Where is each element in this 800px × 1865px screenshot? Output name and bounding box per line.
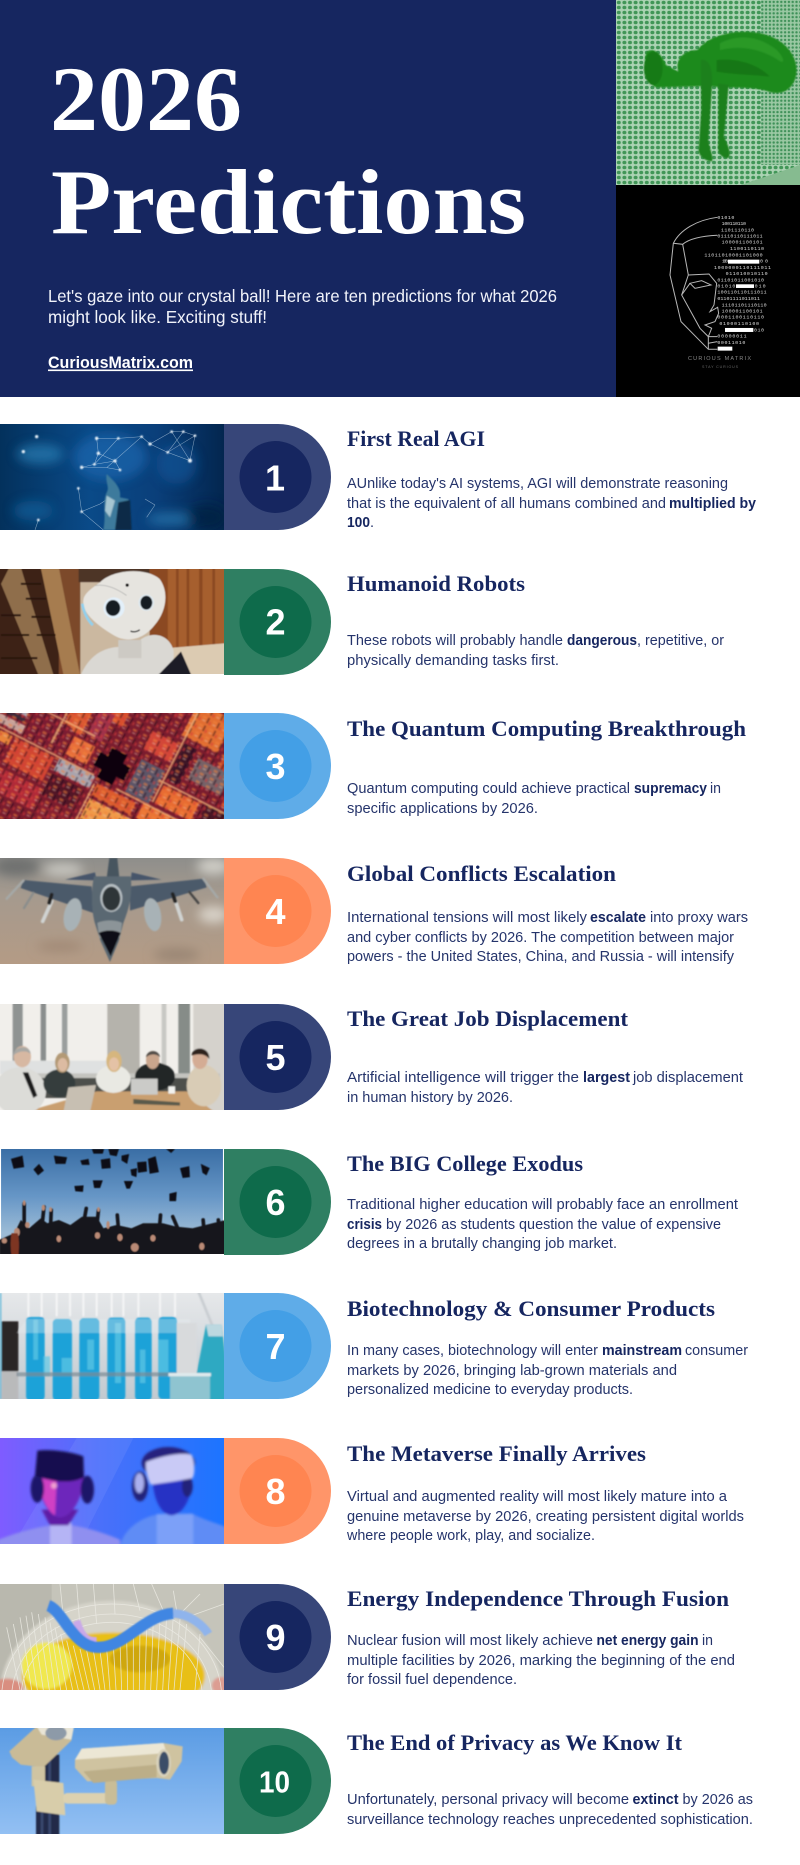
binary digits: 010: [754, 327, 764, 333]
description: multiple facilities by 2026, marking the beginning of the end: [347, 1653, 735, 1669]
heading: Humanoid Robots: [347, 571, 525, 596]
image: fusion wire sculpture: [0, 1584, 224, 1690]
number badge 5: [224, 1004, 331, 1110]
number badge 7: 7: [265, 1326, 286, 1367]
number badge 6: 6: [265, 1182, 286, 1223]
binary digits: 01010: [717, 284, 735, 290]
number badge 6: [224, 1149, 331, 1255]
image: quantum circuit board: [0, 713, 224, 819]
description: net energy gain: [596, 1633, 698, 1649]
binary digits: 0001100110110: [717, 315, 764, 321]
binary digits: 1100110110: [730, 246, 764, 252]
description: [347, 910, 748, 965]
description: Quantum computing could achieve practical: [347, 781, 630, 797]
description: surveillance technology reaches unprecedented sophistication.: [347, 1812, 753, 1828]
image: business meeting: [0, 1004, 224, 1110]
description: Nuclear fusion will most likely achieve: [347, 1633, 593, 1649]
title: Predictions: [51, 151, 526, 253]
description: .: [370, 515, 374, 531]
binary digits: 1101110110: [721, 227, 754, 233]
panel: prediction 5: [0, 1002, 743, 1115]
description: in: [702, 1633, 713, 1649]
description: powers - the United States, China, and Russia - will intensify: [347, 949, 735, 965]
logo wordmark: [688, 356, 751, 369]
title: [50, 48, 526, 253]
description: in: [710, 781, 721, 797]
panel: prediction 9: [0, 1584, 735, 1791]
description: [347, 1633, 735, 1688]
description: and cyber conflicts by 2026. The competition between major: [347, 930, 734, 946]
number badge 4: [224, 858, 331, 964]
description: In many cases, biotechnology will enter: [347, 1343, 598, 1359]
description: [347, 476, 756, 531]
description: [346, 1489, 744, 1544]
panel: prediction 4: [0, 856, 748, 965]
binary digits: 100001100101: [722, 309, 763, 315]
description: mainstream: [602, 1343, 682, 1359]
number badge 8: [224, 1438, 331, 1544]
description: These robots will probably handle: [347, 633, 563, 649]
image: graduates throwing caps: [0, 1149, 224, 1254]
description: AUnlike today's AI systems, AGI will demonstrate reasoning: [347, 476, 728, 492]
description: job displacement: [632, 1070, 743, 1086]
image: blue test tubes: [0, 1293, 224, 1399]
description: [347, 633, 724, 669]
description: , repetitive, or: [637, 633, 724, 649]
image: green figure on binary wall: [616, 0, 800, 185]
description: in human history by 2026.: [347, 1090, 513, 1106]
heading: Biotechnology & Consumer Products: [347, 1296, 715, 1321]
binary digits: 11101101110110: [722, 302, 767, 308]
binary digits: 01000110100: [719, 321, 759, 327]
number badge 3: 3: [265, 746, 286, 787]
description: Virtual and augmented reality will most likely mature into a: [347, 1489, 728, 1505]
description: Artificial intelligence will trigger the: [347, 1070, 579, 1086]
panel: prediction 7: [0, 1291, 748, 1401]
binary digits: 011010010110: [726, 271, 768, 277]
image: glowing neural network: [0, 424, 322, 530]
heading: The Great Job Displacement: [347, 1006, 629, 1031]
binary digits: 11011010001101000: [704, 252, 763, 258]
description: extinct: [632, 1792, 679, 1808]
intro text: Let's gaze into our crystal ball! Here are ten predictions for what 2026: [48, 286, 557, 306]
description: degrees in a brutally changing job market.: [347, 1236, 617, 1252]
description: largest: [583, 1070, 630, 1086]
description: [347, 781, 721, 817]
number badge 8: 8: [265, 1471, 286, 1512]
description: [347, 1792, 753, 1828]
number badge 2: [224, 569, 331, 675]
binary digits: 100001100101: [722, 240, 763, 246]
number badge 9: [224, 1584, 331, 1690]
heading: Energy Independence Through Fusion: [347, 1586, 729, 1611]
description: personalized medicine to everyday products.: [347, 1382, 633, 1398]
website link: CuriousMatrix.com: [48, 353, 193, 372]
image: surveillance cameras: [0, 1728, 224, 1834]
intro text: [48, 286, 557, 327]
panel: prediction 8: [0, 1438, 744, 1546]
description: multiplied by: [669, 496, 756, 512]
binary digits: 100110110111011: [717, 290, 767, 296]
description: dangerous: [567, 633, 637, 649]
description: where people work, play, and socialize.: [346, 1528, 595, 1544]
description: Unfortunately, personal privacy will become: [347, 1792, 629, 1808]
description: Traditional higher education will probably face an enrollment: [347, 1197, 738, 1213]
image: humanoid robot: [0, 569, 224, 674]
panel: prediction 2: [0, 566, 724, 678]
image: two people in VR headsets: [0, 1438, 224, 1544]
number badge 3: [224, 713, 331, 819]
binary digits: 00011010: [717, 340, 745, 346]
description: physically demanding tasks first.: [347, 653, 559, 669]
binary digits: 00: [760, 259, 768, 265]
binary digits: 100: [722, 259, 728, 265]
panel: prediction 10: [0, 1726, 753, 1836]
white binary bars: [718, 260, 759, 351]
number badge 5: 5: [265, 1037, 286, 1078]
heading: Global Conflicts Escalation: [347, 861, 616, 886]
intro text: might look like. Exciting stuff!: [48, 307, 267, 327]
description: specific applications by 2026.: [347, 801, 538, 817]
title: 2026: [50, 48, 242, 150]
number badge 1: 1: [265, 458, 285, 498]
description: into proxy wars: [650, 910, 748, 926]
heading: The Quantum Computing Breakthrough: [347, 716, 746, 741]
description: escalate: [590, 910, 646, 926]
image: fighter jet: [0, 858, 224, 964]
description: consumer: [685, 1343, 748, 1359]
image: binary code face logo: [616, 185, 800, 397]
heading: First Real AGI: [347, 426, 485, 451]
description: [347, 1070, 743, 1106]
heading: The End of Privacy as We Know It: [347, 1730, 683, 1755]
description: by 2026 as: [682, 1792, 753, 1808]
binary digits: 010: [755, 284, 766, 290]
description: crisis: [347, 1217, 382, 1233]
description: [347, 1343, 748, 1398]
logo wordmark: STAY CURIOUS: [702, 365, 739, 369]
binary digits: 01010: [717, 215, 734, 221]
panel: prediction 1: [0, 424, 756, 531]
description: by 2026 as students question the value of expensive: [386, 1217, 721, 1233]
description: [347, 1197, 738, 1252]
binary digits: 1000000110111011: [714, 265, 771, 271]
description: 100: [347, 515, 370, 531]
description: International tensions will most likely: [347, 910, 588, 926]
number badge 9: 9: [265, 1617, 286, 1658]
number badge 10: [224, 1728, 331, 1834]
number badge 7: [224, 1293, 331, 1399]
description: genuine metaverse by 2026, creating persistent digital worlds: [347, 1509, 744, 1525]
number badge 10: 10: [259, 1764, 290, 1800]
binary digits: 01101111011011: [717, 296, 760, 302]
panel: prediction 6: [0, 1149, 738, 1256]
number badge 2: 2: [265, 602, 286, 642]
description: for fossil fuel dependence.: [347, 1672, 517, 1688]
binary digits: 01101011001010: [717, 277, 764, 283]
icon: face line art: [670, 217, 719, 349]
number badge 4: 4: [265, 891, 286, 932]
binary digits: 00000011: [717, 334, 747, 340]
description: that is the equivalent of all humans combined and: [347, 496, 666, 512]
binary digits: [704, 215, 771, 346]
binary digits: 100110110: [722, 221, 746, 227]
heading: The BIG College Exodus: [347, 1151, 583, 1176]
logo wordmark: CURIOUS MATRIX: [688, 356, 751, 362]
number badge 1: [224, 424, 331, 530]
panel: prediction 3: [0, 578, 746, 953]
heading: The Metaverse Finally Arrives: [347, 1441, 646, 1466]
description: supremacy: [634, 781, 707, 797]
description: markets by 2026, bringing lab-grown materials and: [347, 1363, 677, 1379]
binary digits: 01110110111011: [717, 234, 763, 240]
header panel: [0, 0, 616, 397]
